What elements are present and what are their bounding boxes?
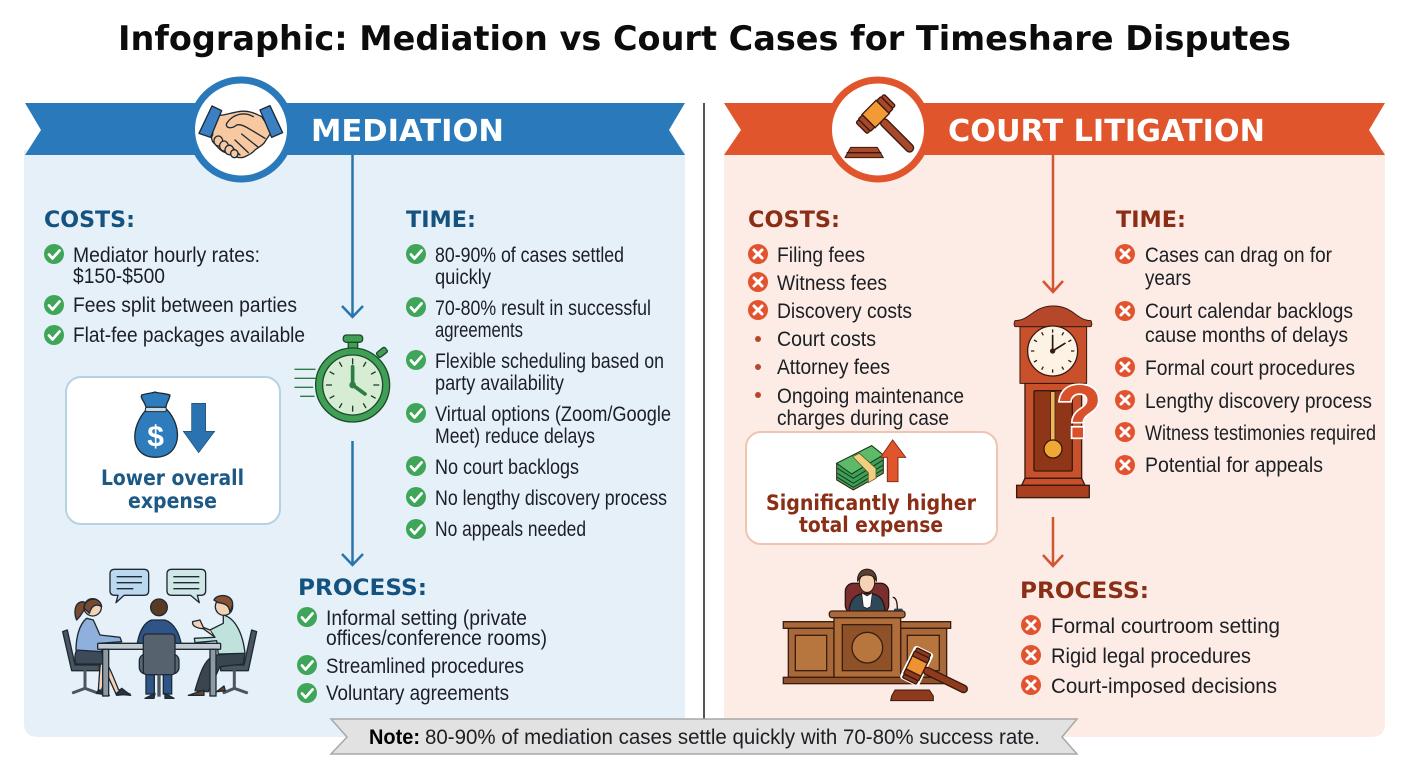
court heading: COURT LITIGATION — [948, 114, 1265, 149]
process item 3: Voluntary agreements — [326, 682, 509, 705]
callout text: total expense — [799, 513, 943, 537]
note body text: 80-90% of mediation cases settle quickly with 70-80% success rate. — [425, 726, 1040, 749]
costs item 2: Fees split between parties — [73, 294, 297, 317]
costs item 6 — [755, 385, 964, 430]
time item 4: Meet) reduce delays — [435, 425, 595, 448]
costs item 1: Filing fees — [777, 244, 865, 267]
costs heading: COSTS: — [44, 208, 135, 233]
costs item 3: Flat-fee packages available — [73, 324, 305, 347]
time item 3 — [406, 350, 664, 395]
costs heading: COSTS: — [748, 208, 840, 233]
callout text — [101, 466, 244, 513]
time item 2 — [1115, 300, 1353, 347]
time heading: TIME: — [406, 208, 476, 233]
time item 2: agreements — [435, 319, 523, 342]
time item 1 — [1115, 244, 1332, 290]
note label: Note: — [369, 726, 420, 749]
costs item 1: Mediator hourly rates: — [73, 244, 260, 267]
time item 3: Flexible scheduling based on — [435, 350, 664, 373]
center divider — [703, 103, 705, 719]
time item 3: Formal court procedures — [1145, 357, 1355, 380]
icon: money with up arrow — [837, 440, 906, 490]
callout text: Lower overall — [101, 466, 244, 490]
court time — [1115, 208, 1376, 477]
time item 2 — [406, 297, 651, 342]
process item 1: Informal setting (private — [326, 607, 527, 630]
connector arrow bottom — [1043, 517, 1063, 566]
costs item 5: Attorney fees — [777, 356, 890, 379]
time item 1 — [406, 244, 624, 289]
process item 2: Streamlined procedures — [326, 655, 524, 678]
time item 5: Witness testimonies required — [1145, 422, 1376, 445]
panel: mediation — [24, 80, 685, 737]
callout text: expense — [128, 489, 217, 513]
time item 1: years — [1145, 267, 1191, 290]
mediation costs — [44, 208, 305, 347]
court ribbon — [724, 103, 1385, 155]
icon: gavel badge — [828, 80, 928, 179]
time item 1: 80-90% of cases settled — [435, 244, 624, 267]
time item 2: cause months of delays — [1145, 324, 1348, 347]
time item 7: No appeals needed — [435, 518, 586, 541]
illustration: people in meeting — [63, 569, 257, 698]
process item 1 — [297, 607, 547, 650]
process item 3: Court-imposed decisions — [1051, 675, 1277, 698]
time item 2: 70-80% result in successful — [435, 297, 651, 320]
process heading: PROCESS: — [1020, 579, 1149, 604]
time item 5: No court backlogs — [435, 456, 579, 479]
time item 1: quickly — [435, 266, 491, 289]
callout: higher expense — [746, 432, 997, 544]
time item 4: Virtual options (Zoom/Google — [435, 403, 671, 426]
icon: handshake badge — [192, 80, 290, 179]
connector arrow top — [342, 155, 363, 317]
callout text: Significantly higher — [766, 491, 977, 515]
icon: grandfather clock with question mark: ? — [1056, 369, 1102, 453]
panel: court litigation — [724, 80, 1385, 737]
time item 6: No lengthy discovery process — [435, 487, 667, 510]
connector arrow top — [1043, 155, 1063, 292]
costs item 1 — [44, 244, 260, 288]
illustration: judge at courtroom bench — [783, 569, 974, 706]
callout text — [766, 491, 977, 537]
costs item 6: Ongoing maintenance — [777, 385, 964, 408]
time item 2: Court calendar backlogs — [1145, 300, 1353, 323]
time item 3: party availability — [435, 372, 564, 395]
costs item 3: Discovery costs — [777, 300, 912, 323]
time heading: TIME: — [1116, 208, 1186, 233]
time item 6: Potential for appeals — [1145, 454, 1323, 477]
connector arrow bottom — [342, 441, 363, 565]
mediation process — [297, 576, 547, 705]
time item 4 — [406, 403, 671, 448]
icon: money bag with down arrow — [135, 392, 215, 457]
callout: lower expense — [66, 377, 280, 524]
costs item 2: Witness fees — [777, 272, 887, 295]
process heading: PROCESS: — [298, 576, 427, 601]
mediation ribbon — [25, 103, 685, 155]
costs item 6: charges during case — [777, 407, 949, 430]
note ribbon — [331, 719, 1077, 754]
mediation time — [406, 208, 671, 541]
title: Infographic: Mediation vs Court Cases for Timeshare Disputes — [118, 19, 1291, 59]
time item 1: Cases can drag on for — [1145, 244, 1332, 267]
process item 1: offices/conference rooms) — [326, 627, 547, 650]
process item 2: Rigid legal procedures — [1051, 645, 1251, 668]
icon: grandfather clock with question mark — [1014, 306, 1102, 498]
costs item 1: $150-$500 — [73, 265, 165, 288]
icon: money bag with down arrow: $ — [147, 421, 164, 454]
process item 1: Formal courtroom setting — [1051, 615, 1280, 638]
court process — [1020, 579, 1280, 698]
mediation heading: MEDIATION — [311, 114, 504, 149]
costs item 4: Court costs — [777, 328, 876, 351]
time item 4: Lengthy discovery process — [1145, 390, 1372, 413]
court costs — [748, 208, 964, 430]
icon: stopwatch — [295, 335, 390, 422]
